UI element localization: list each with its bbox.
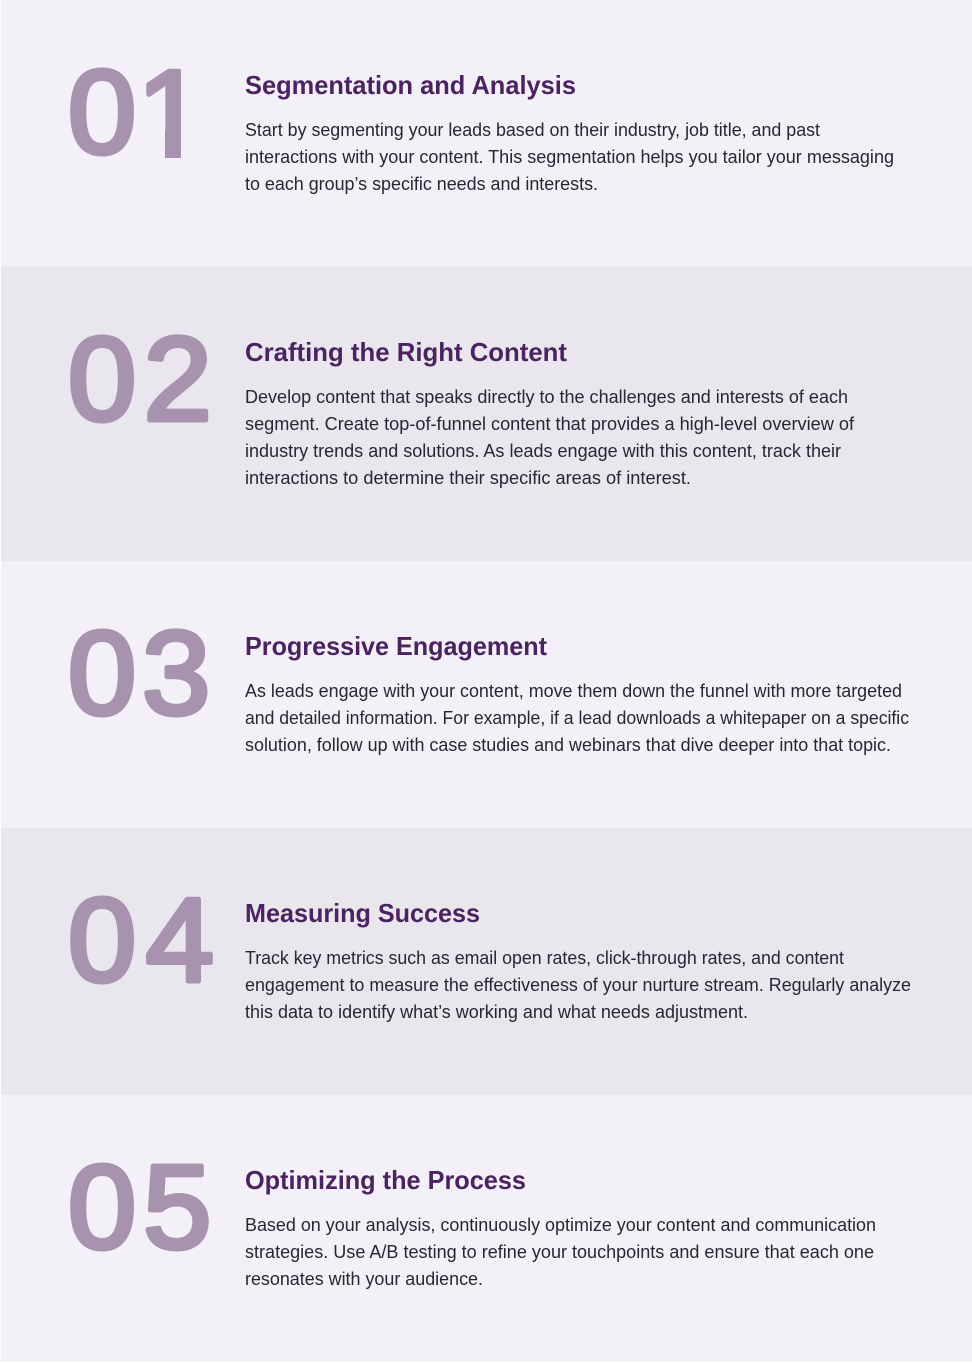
panel: step 1 segmentation and analysis [1,0,972,267]
body text: step 3: As leads engage with your content, move them down the funnel with more targeted [245,681,902,701]
panel: step 2 crafting the right content [1,267,972,561]
heading: measuring success: Measuring Success [245,898,480,928]
body text: step 3: and detailed information. For example, if a lead downloads a whitepaper on a specific [245,708,909,728]
body text: step 5: strategies. Use A/B testing to refine your touchpoints and ensure that each one [245,1242,874,1262]
body text: step 1 [245,120,894,194]
number 01: 1 [137,46,205,179]
body text: step 2: interactions to determine their specific areas of interest. [245,468,691,488]
body text: step 4: this data to identify what’s working and what needs adjustment. [245,1002,748,1022]
body text: step 2 [245,387,855,488]
panel: step 3 progressive engagement [1,561,972,828]
body text: step 4: engagement to measure the effectiveness of your nurture stream. Regularly analyze [245,975,911,995]
body text: step 4 [245,948,911,1022]
panel: step 5 optimizing the process [1,1095,972,1362]
heading: segmentation and analysis: Segmentation and Analysis [245,70,576,100]
number 02: 02 [68,313,212,446]
body text: step 3: solution, follow up with case studies and webinars that dive deeper into that topic. [245,735,891,755]
heading: progressive engagement: Progressive Engagement [245,631,547,661]
body text: step 1: interactions with your content. This segmentation helps you tailor your messaging [245,147,894,167]
heading: crafting the right content: Crafting the Right Content [245,337,567,367]
body text: step 4: Track key metrics such as email open rates, click-through rates, and content [245,948,844,968]
body text: step 2: industry trends and solutions. As leads engage with this content, track their [245,441,841,461]
heading: optimizing the process: Optimizing the Process [245,1165,526,1195]
panel: step 4 measuring success [1,828,972,1095]
body text: step 5 [245,1215,876,1289]
body text: step 3 [245,681,909,755]
body text: step 1: to each group’s specific needs and interests. [245,174,598,194]
body text: step 5: resonates with your audience. [245,1269,483,1289]
number 05: 05 [68,1141,211,1274]
number 03: 03 [68,607,210,740]
body text: step 1: Start by segmenting your leads based on their industry, job title, and past [245,120,820,140]
body text: step 2: segment. Create top-of-funnel content that provides a high-level overview of [245,414,855,434]
number 04: 04 [68,874,214,1007]
number 01 [70,68,181,158]
number 01: 0 [68,46,136,179]
body text: step 2: Develop content that speaks directly to the challenges and interests of each [245,387,848,407]
body text: step 5: Based on your analysis, continuously optimize your content and communication [245,1215,876,1235]
